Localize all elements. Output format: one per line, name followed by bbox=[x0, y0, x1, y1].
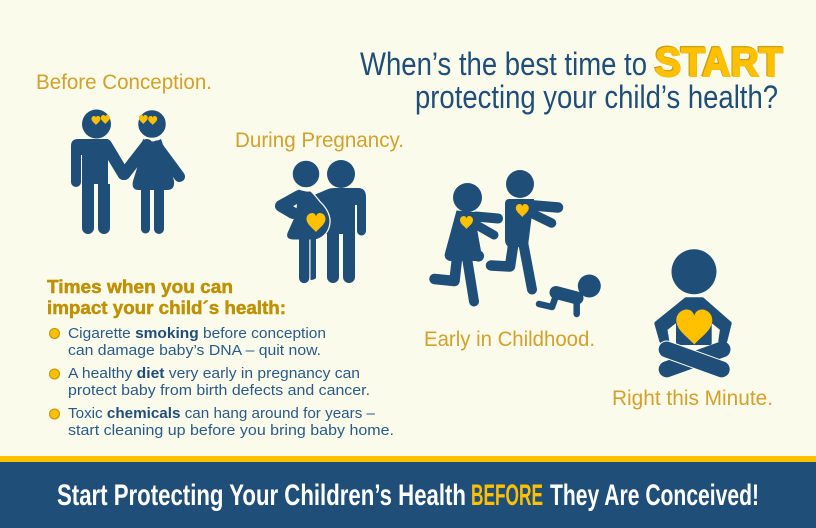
label: before conception: Before Conception. bbox=[36, 71, 212, 94]
banner emphasis: BEFORE: BEFORE bbox=[471, 479, 543, 512]
bullet list bbox=[50, 325, 394, 439]
title: When’s the best time to bbox=[360, 46, 647, 82]
footer banner: Start Protecting Your Children’s Health bbox=[57, 479, 466, 512]
bullet: smoking: can damage baby’s DNA – quit now. bbox=[68, 342, 321, 359]
icon: belly heart bbox=[306, 213, 326, 232]
bullet: diet bbox=[50, 365, 370, 399]
bullet: chemicals: Toxic chemicals can hang around for years – bbox=[68, 405, 376, 422]
icon: large heart bbox=[676, 310, 712, 344]
heading: times when you can impact: Times when you can bbox=[47, 276, 233, 297]
icon: couple before conception bbox=[71, 110, 180, 234]
title emphasis: START: START bbox=[655, 39, 783, 85]
heading: times when you can impact: impact your child´s health: bbox=[47, 297, 286, 318]
title bbox=[360, 39, 783, 115]
heading: times when you can impact bbox=[47, 276, 286, 318]
bullet: diet: A healthy diet very early in pregnancy can bbox=[68, 365, 360, 382]
label: during pregnancy: During Pregnancy. bbox=[235, 129, 404, 152]
bullet: chemicals: start cleaning up before you bring baby home. bbox=[68, 422, 394, 439]
icon: pregnant couple bbox=[281, 160, 366, 283]
icon: sitting figure bbox=[656, 249, 730, 369]
bullet: diet: protect baby from birth defects and cancer. bbox=[68, 382, 370, 399]
bullet: chemicals bbox=[50, 405, 394, 439]
bullet: smoking bbox=[50, 325, 326, 359]
label: early in childhood: Early in Childhood. bbox=[424, 328, 595, 351]
icon: chest hearts bbox=[460, 204, 529, 229]
icon: heart eyes bbox=[92, 115, 157, 125]
label: right this minute: Right this Minute. bbox=[612, 387, 773, 410]
bullet: smoking: Cigarette smoking before conception bbox=[68, 325, 326, 342]
icon: family walking bbox=[434, 170, 601, 314]
footer banner bbox=[0, 456, 816, 528]
